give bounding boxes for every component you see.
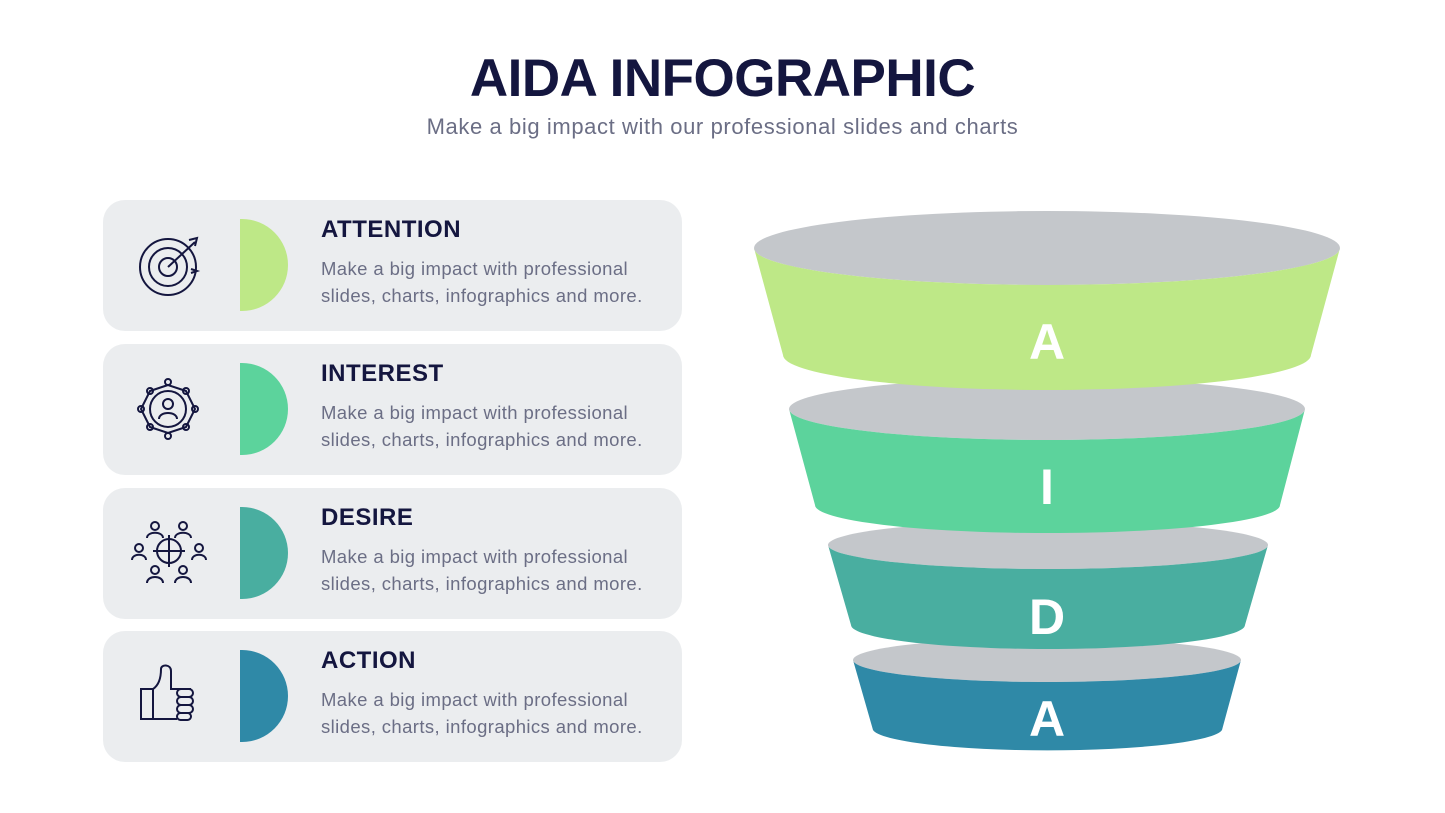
heading: DESIRE: [321, 504, 413, 531]
text: Make a big impact with professional: [321, 546, 628, 567]
segment 4: A: [1029, 691, 1065, 747]
half disc: [240, 363, 288, 455]
icon: thumbs up: [140, 664, 194, 721]
segment 2: [789, 378, 1305, 533]
segment 3: [828, 521, 1268, 649]
text: Make a big impact with professional: [321, 258, 628, 279]
panel: interest: [103, 344, 682, 475]
text: slides, charts, infographics and more.: [321, 716, 643, 737]
segment 3: D: [1029, 589, 1065, 645]
text: [321, 258, 643, 306]
panel: attention: [103, 200, 682, 331]
text: [321, 546, 643, 594]
segment 1: [754, 211, 1340, 390]
half disc: [240, 219, 288, 311]
panel: action: [103, 631, 682, 762]
text: slides, charts, infographics and more.: [321, 429, 643, 450]
segment 2: I: [1040, 459, 1054, 515]
text: Make a big impact with professional: [321, 402, 628, 423]
text: slides, charts, infographics and more.: [321, 573, 643, 594]
text: slides, charts, infographics and more.: [321, 285, 643, 306]
text: [321, 689, 643, 737]
heading: ATTENTION: [321, 216, 461, 243]
text: [321, 402, 643, 450]
icon: target: [139, 236, 200, 296]
half disc: [240, 507, 288, 599]
icon: network: [137, 378, 199, 440]
half disc: [240, 650, 288, 742]
title: AIDA INFOGRAPHIC: [470, 49, 975, 108]
segment 1: A: [1029, 314, 1065, 370]
subtitle: Make a big impact with our professional slides and charts: [427, 114, 1018, 139]
heading: INTEREST: [321, 360, 444, 387]
segment 4: [853, 638, 1241, 750]
heading: ACTION: [321, 647, 416, 674]
text: Make a big impact with professional: [321, 689, 628, 710]
panel: desire: [103, 488, 682, 619]
icon: audience target: [131, 521, 207, 583]
